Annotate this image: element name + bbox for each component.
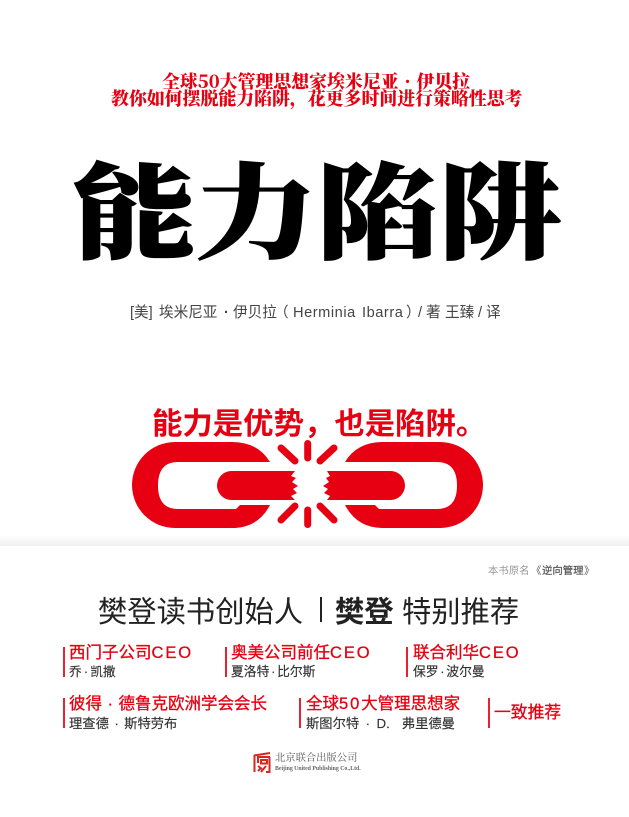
recommender closing: 一致推荐 bbox=[494, 702, 561, 722]
recommender 5: · bbox=[366, 716, 370, 731]
subtitle bbox=[111, 68, 522, 111]
recommender 4: 彼得 德鲁克欧洲学会会长 bbox=[69, 695, 267, 713]
original title note: 》 bbox=[584, 566, 594, 577]
main title: 能力陷阱 bbox=[73, 131, 561, 280]
author line: Ibarra bbox=[362, 305, 403, 321]
recommender 4 bbox=[63, 694, 267, 731]
subtitle: 全球50大管理思想家埃米尼亚 伊贝拉 bbox=[162, 68, 470, 94]
recommendation heading: 樊登读书创始人 bbox=[98, 589, 303, 631]
right broken piece bbox=[323, 471, 405, 500]
recommender 1 bbox=[63, 644, 193, 679]
recommendation heading bbox=[98, 589, 519, 631]
author line bbox=[130, 304, 501, 321]
author line: 著 bbox=[426, 305, 441, 321]
recommender 4: 理查德 斯特劳布 bbox=[69, 716, 177, 731]
original title note: 《 bbox=[531, 566, 541, 577]
author line: · bbox=[224, 305, 229, 321]
recommender 1: 西门子公司CEO bbox=[69, 644, 193, 662]
author line: Herminia bbox=[293, 305, 356, 321]
subtitle: · bbox=[404, 68, 411, 94]
author line: 译 bbox=[486, 305, 501, 321]
recommender 2: · bbox=[271, 664, 275, 679]
original title note: 本书原名 bbox=[488, 566, 530, 577]
recommender 3 bbox=[406, 644, 520, 679]
author line: 伊贝拉 bbox=[233, 305, 277, 321]
recommender 3: 联合利华CEO bbox=[413, 644, 520, 662]
author line: 埃米尼亚 bbox=[159, 305, 217, 321]
shadow band bbox=[0, 535, 629, 546]
recommender 1: · bbox=[84, 665, 88, 679]
publisher name: 北京联合出版公司 bbox=[275, 749, 357, 764]
spark rays bbox=[281, 444, 334, 524]
recommender 4: · bbox=[114, 716, 119, 731]
recommender 1: 乔 凯撒 bbox=[69, 665, 116, 679]
author line: 王臻 bbox=[445, 305, 474, 321]
recommender 3: 保罗 波尔曼 bbox=[413, 664, 485, 679]
recommendation heading: 特别推荐 bbox=[402, 589, 519, 631]
recommender 5 bbox=[299, 694, 460, 731]
author line: [美] bbox=[130, 305, 153, 321]
recommender 4: · bbox=[108, 695, 113, 713]
recommender 2 bbox=[225, 644, 371, 679]
author line: （ bbox=[274, 305, 289, 321]
left chain link bbox=[132, 442, 270, 528]
recommender 5: 全球50大管理思想家 bbox=[306, 695, 460, 713]
original title note bbox=[488, 565, 594, 577]
publisher english name: Beijing United Publishing Co.,Ltd. bbox=[275, 766, 361, 772]
recommender 2: 夏洛特 比尔斯 bbox=[231, 664, 315, 679]
author line: ） bbox=[406, 305, 421, 321]
original title note: 逆向管理 bbox=[542, 566, 584, 577]
slogan: 能力是优势，也是陷阱。 bbox=[152, 399, 486, 443]
recommender 5: 斯图尔特 D. 弗里德曼 bbox=[306, 716, 455, 731]
author line: / bbox=[478, 305, 482, 321]
recommendation heading: 樊登 bbox=[335, 589, 394, 631]
author line: / bbox=[418, 305, 422, 321]
recommender 3: · bbox=[440, 664, 445, 679]
subtitle: 教你如何摆脱能力陷阱，花更多时间进行策略性思考 bbox=[111, 85, 522, 111]
icon: broken chain bbox=[132, 440, 483, 528]
right chain link bbox=[345, 442, 483, 528]
recommender 2: 奥美公司前任CEO bbox=[231, 644, 371, 662]
icon: publisher seal bbox=[254, 752, 270, 773]
left broken piece bbox=[217, 471, 298, 500]
